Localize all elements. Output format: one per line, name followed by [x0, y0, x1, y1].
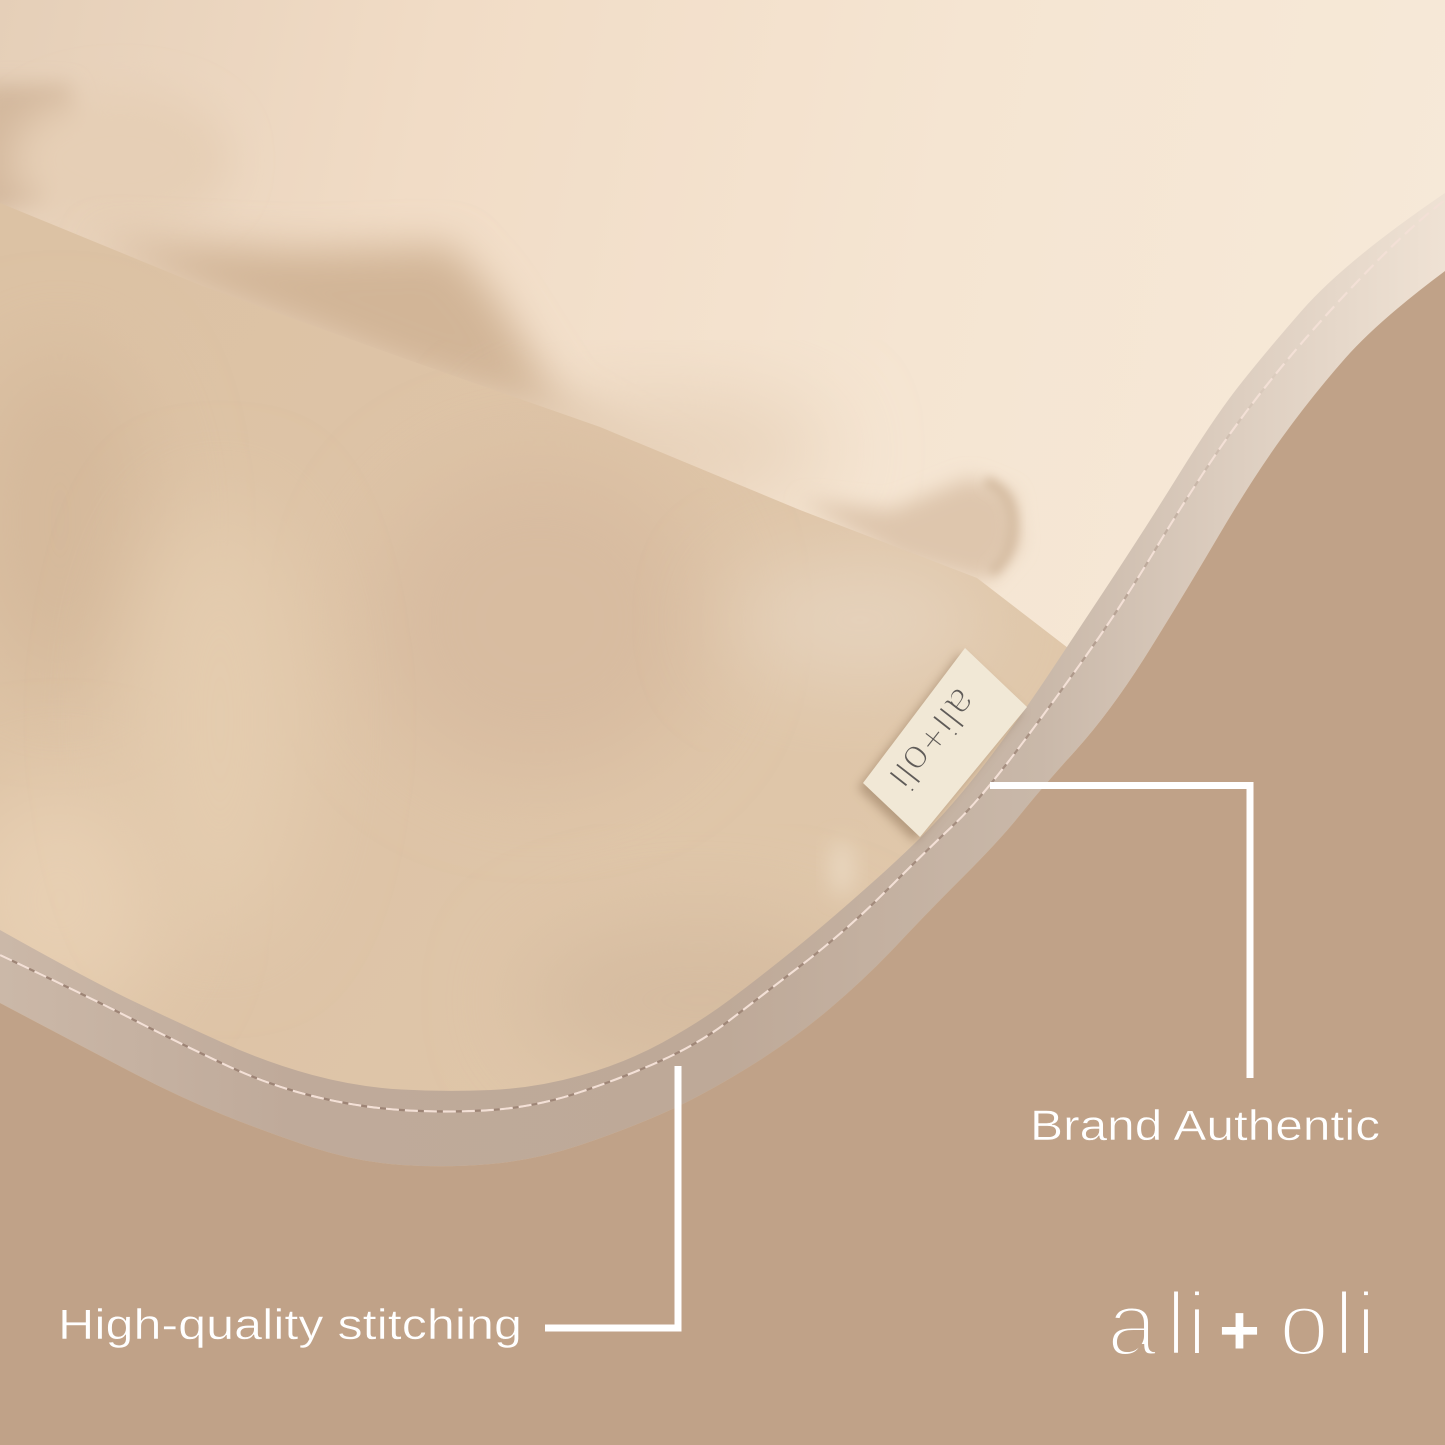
upper fabric panel [0, 0, 1445, 760]
soft shadow: wide falloff [490, 400, 830, 500]
logo: + [1219, 1291, 1260, 1369]
logo [1107, 1275, 1376, 1375]
logo: ali [1107, 1275, 1207, 1375]
label: high-quality stitching: High-quality stitching [58, 1301, 522, 1349]
logo: oli [1279, 1275, 1376, 1375]
brand tag [858, 648, 1027, 842]
label: brand authentic: Brand Authentic [1030, 1102, 1380, 1150]
leader line: stitching [545, 1066, 678, 1328]
leader line: brand authentic [990, 786, 1250, 1078]
pocket panel [0, 208, 1068, 1166]
soft shadow: left area [10, 90, 230, 230]
tag text: ali+oli [880, 680, 988, 799]
soft shadow: right ridge [985, 482, 1012, 572]
soft shadow: under pocket centre [90, 240, 720, 490]
soft shadow: top left fold [0, 85, 82, 215]
binding edge [0, 193, 1445, 1166]
soft shadow: right fold [800, 478, 1018, 582]
stitching line [0, 200, 1445, 1112]
